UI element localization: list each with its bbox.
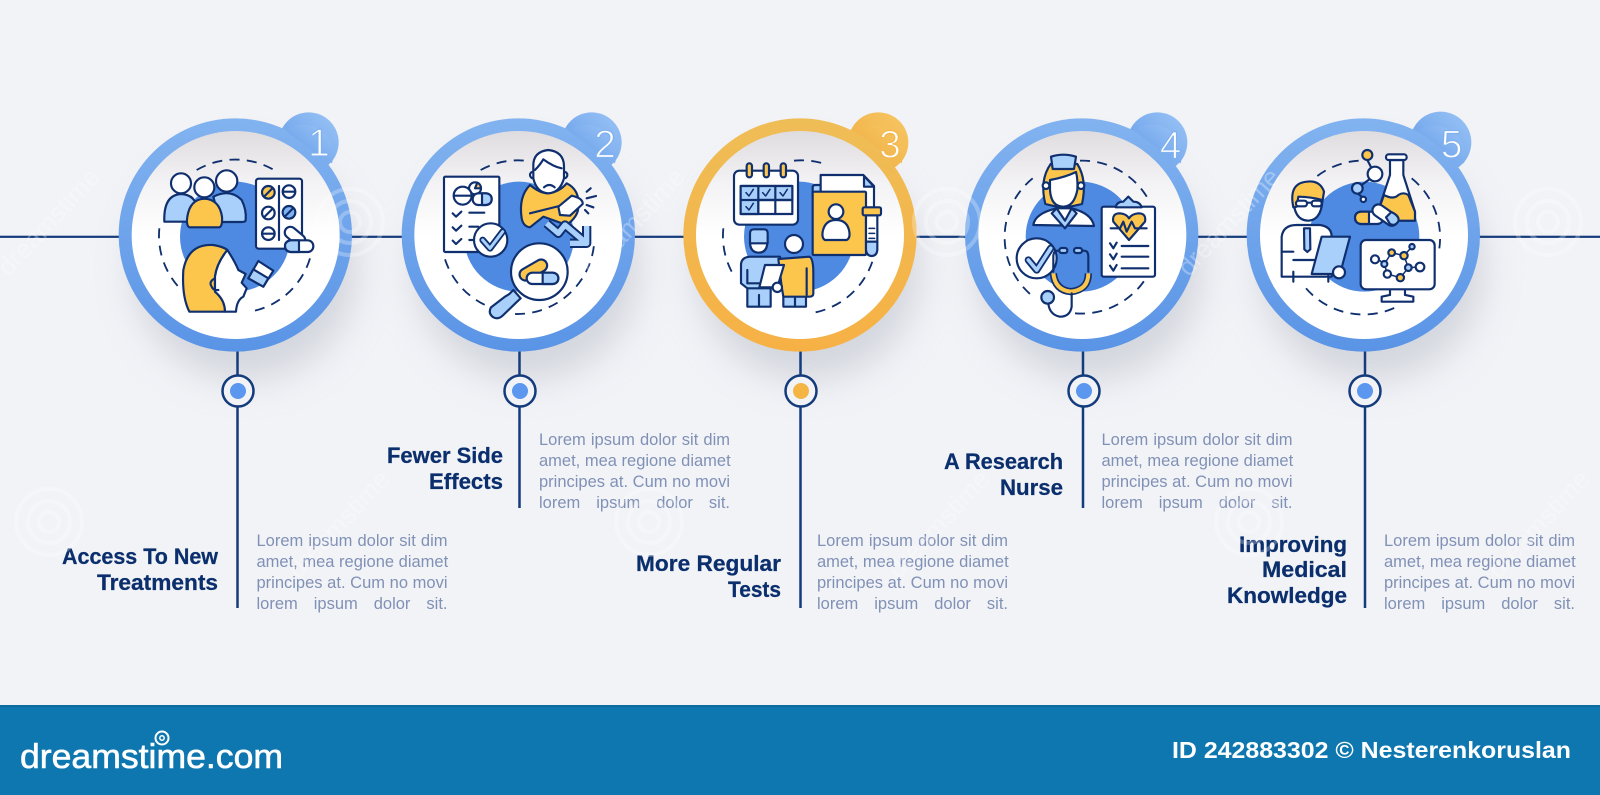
watermark overlay: dreamstime — [281, 464, 396, 584]
panel: step 5 improving medical knowledge — [1227, 112, 1480, 608]
heading 4: Nurse — [1000, 475, 1063, 500]
body text 4 — [1102, 431, 1294, 512]
connector and node 2 — [504, 350, 536, 508]
heading 5: Improving — [1239, 532, 1347, 557]
heading 2: Effects — [429, 469, 503, 494]
body text 1: amet, mea regione diamet — [256, 553, 448, 571]
body text 2: amet, mea regione diamet — [539, 452, 731, 470]
circle icon 4: 4 — [1160, 125, 1181, 168]
body text 3 — [817, 532, 1009, 613]
body text 2: lorem ipsum dolor sit. — [539, 494, 730, 512]
heading 4: A Research — [944, 449, 1063, 474]
body text 3: amet, mea regione diamet — [817, 553, 1009, 571]
body text 4: amet, mea regione diamet — [1102, 452, 1293, 470]
body text 2 — [539, 431, 731, 512]
footer credit: ID 242883302 © Nesterenkoruslan — [1172, 737, 1571, 763]
watermark overlay: dreamstime — [1171, 162, 1286, 282]
body text 3: Lorem ipsum dolor sit dim — [817, 532, 1008, 550]
body text 5 — [1384, 532, 1576, 613]
heading 1 — [62, 544, 219, 595]
panel: step 2 fewer side effects — [387, 112, 635, 508]
footer bar — [0, 705, 1600, 795]
body text 4: lorem ipsum dolor sit. — [1102, 494, 1292, 512]
circle icon 1: 1 — [308, 122, 330, 165]
watermark overlay: dreamstime — [881, 464, 996, 584]
watermark overlay: dreamstime — [576, 162, 691, 282]
circle icon 3 — [683, 112, 917, 352]
connector and node 4 — [1068, 350, 1100, 508]
heading 1: Treatments — [97, 570, 218, 595]
heading 5: Medical — [1262, 557, 1347, 582]
circle icon 3: 3 — [879, 123, 901, 166]
body text 1: principes at. Cum no movi — [256, 574, 448, 592]
circle icon 5: 5 — [1441, 123, 1462, 166]
body text 3: principes at. Cum no movi — [817, 574, 1008, 592]
watermark overlay: dreamstime — [1481, 464, 1596, 584]
circle icon 2 — [402, 112, 635, 352]
heading 3: More Regular — [636, 551, 781, 576]
connector and node 5 — [1350, 350, 1380, 608]
heading 5: Knowledge — [1227, 583, 1347, 608]
circle icon 5 — [1247, 112, 1480, 352]
body text 4: Lorem ipsum dolor sit dim — [1102, 431, 1292, 449]
body text 2: Lorem ipsum dolor sit dim — [539, 431, 730, 449]
heading 3 — [636, 551, 781, 602]
heading 4 — [944, 449, 1063, 500]
circle icon 2: 2 — [594, 123, 616, 166]
footer logo: dreamstime.com — [20, 738, 283, 776]
body text 5: principes at. Cum no movi — [1384, 574, 1575, 592]
heading 1: Access To New — [62, 544, 219, 569]
panel: step 3 more regular tests — [636, 112, 917, 608]
body text 1: Lorem ipsum dolor sit dim — [256, 532, 448, 550]
body text 5: amet, mea regione diamet — [1384, 553, 1576, 571]
horizontal timeline — [0, 236, 1600, 238]
body text 1 — [256, 532, 448, 613]
circle icon 4 — [965, 112, 1198, 352]
connector and node 3 — [786, 350, 816, 608]
body text 5: Lorem ipsum dolor sit dim — [1384, 532, 1575, 550]
circle icon 1 — [119, 112, 352, 352]
body text 4: principes at. Cum no movi — [1102, 473, 1292, 491]
heading 2: Fewer Side — [387, 443, 503, 468]
heading 2 — [387, 443, 503, 494]
heading 3: Tests — [728, 577, 781, 602]
body text 3: lorem ipsum dolor sit. — [817, 595, 1008, 613]
panel: step 4 a research nurse — [944, 112, 1198, 508]
panel: step 1 access to new treatments — [62, 112, 352, 608]
body text 5: lorem ipsum dolor sit. — [1384, 595, 1575, 613]
heading 5 — [1227, 532, 1347, 608]
body text 1: lorem ipsum dolor sit. — [256, 595, 448, 613]
body text 2: principes at. Cum no movi — [539, 473, 730, 491]
connector and node 1 — [222, 350, 254, 608]
